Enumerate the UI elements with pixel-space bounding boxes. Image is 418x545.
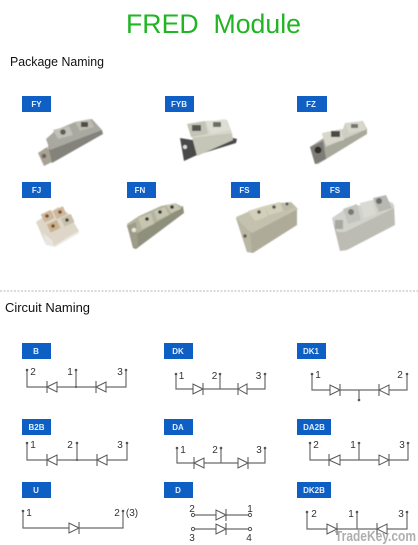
circuit: U: U [33,486,39,495]
label: FY: FY [31,100,42,109]
circuit: B: 1 [67,367,73,378]
circuit: DA2B [297,419,409,466]
label: FZ [297,96,327,112]
label: FJ [22,182,51,198]
circuit: DA2B: 3 [399,440,405,451]
circuit: D: 3 [189,533,195,544]
circuit: B [22,343,127,393]
circuit: DK2B: 2 [311,509,317,520]
circuit: U: 2 [114,508,120,519]
circuit: DA2B: DA2B [303,423,325,432]
dashed divider [0,290,418,292]
module photo: FS second [332,195,395,251]
module photo: FS [236,202,298,253]
circuit: D: 1 [247,504,253,515]
circuit: DK: DK [172,347,184,356]
circuit: DK: 2 [212,371,218,382]
label: FYB [165,96,194,112]
title: FRED Module [126,9,301,39]
circuit: DK1 [297,343,408,401]
circuit: DK [164,343,266,395]
circuit: B2B: 1 [30,440,36,451]
circuit: DK1: 1 [315,370,321,381]
circuit: DK: 3 [256,371,262,382]
circuit: B2B: 2 [67,440,73,451]
circuit: D: D [175,486,181,495]
label: FS second: FS [330,186,341,195]
circuit: DK1: 2 [397,370,403,381]
circuit: DK: 1 [179,371,185,382]
module photo: FJ [36,206,79,247]
circuit: B2B [22,419,128,466]
label: FJ: FJ [32,186,41,195]
circuit: D: 4 [246,533,252,544]
circuit: B: 2 [30,367,36,378]
label: FZ: FZ [306,100,316,109]
circuit: DK2B [297,482,408,535]
circuit: DK2B: DK2B [303,486,325,495]
label: FS: FS [239,186,250,195]
circuit: B: B [33,347,39,356]
circuit: U: (3) [126,508,138,519]
circuit: DA [164,419,266,469]
circuit: D: 2 [189,504,195,515]
circuit: B2B: B2B [28,423,45,432]
circuit: DK2B: 1 [348,509,354,520]
circuit: DA2B: 2 [313,440,319,451]
circuit: DK1: DK1 [303,347,320,356]
module photo: FY [38,119,103,166]
circuit: DA: 3 [256,445,262,456]
circuit: DA: 1 [180,445,186,456]
label: FY [22,96,51,112]
circuit: B: 3 [117,367,123,378]
heading: circuit naming: Circuit Naming [5,301,90,315]
module photo: FZ [310,121,367,164]
label: FN [127,182,156,198]
circuit: DK2B: 3 [398,509,404,520]
module photo: FN [127,203,184,249]
circuit: D [164,482,253,544]
circuit: DA2B: 1 [350,440,356,451]
circuit: DA: DA [172,423,184,432]
label: FS second [321,182,350,198]
circuit: DA: 2 [212,445,218,456]
circuit: U [22,482,138,534]
label: FYB: FYB [171,100,187,109]
label: FN: FN [135,186,146,195]
module photo: FYB [180,119,237,161]
circuit: U: 1 [26,508,32,519]
heading: package naming: Package Naming [10,55,104,69]
circuit: B2B: 3 [117,440,123,451]
label: FS [231,182,260,198]
